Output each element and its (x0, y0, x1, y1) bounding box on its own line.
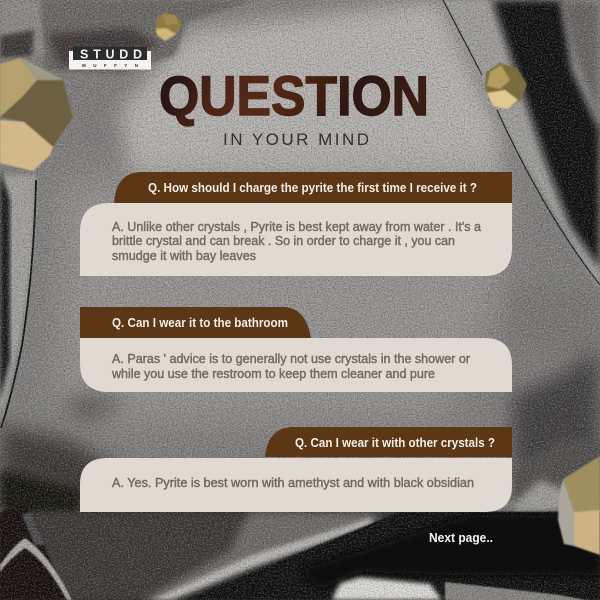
logo: Studd Muffyn (69, 47, 151, 70)
answer 1 text (112, 220, 481, 263)
question 1 bar (114, 172, 512, 203)
title: QUESTION (159, 64, 429, 127)
panel: question and answer 1 (80, 172, 512, 276)
right dark folds (443, 0, 600, 290)
question 1 text: Q. How should I charge the pyrite the first time I receive it ? (148, 181, 477, 195)
answer 2 text: while you use the restroom to keep them cleaner and pure (111, 367, 435, 381)
icon: small pyrite crystal, top (156, 12, 182, 41)
question 2 text: Q. Can I wear it to the bathroom (112, 316, 288, 330)
answer 1 text: smudge it with bay leaves (112, 249, 256, 263)
logo: Studd Muffyn: MUFFYN (82, 63, 138, 68)
icon: large pyrite crystal, top left (0, 57, 73, 171)
next page label: Next page.. (429, 531, 493, 545)
left fold (0, 175, 36, 425)
white highlight (332, 577, 442, 600)
answer 2 text: A. Paras ' advice is to generally not use crystals in the shower or (112, 352, 470, 366)
answer 3 text: A. Yes. Pyrite is best worn with amethyst and with black obsidian (112, 476, 474, 490)
panel: question and answer 2 (80, 307, 512, 392)
panel: question and answer 3 (80, 427, 512, 512)
answer 1 text: A. Unlike other crystals , Pyrite is best kept away from water . It's a (112, 220, 481, 234)
logo: Studd Muffyn: STUDD (80, 48, 142, 62)
question 3 bar (265, 427, 512, 457)
subtitle: IN YOUR MIND (223, 130, 369, 149)
answer 2 text (111, 352, 470, 381)
answer 1 text: brittle crystal and can break . So in order to charge it , you can (112, 234, 455, 248)
answer 1 box (80, 203, 512, 276)
icon: pyrite crystal, right (485, 63, 527, 109)
lower left dark (0, 425, 120, 520)
answer 2 box (80, 338, 512, 392)
icon: pyrite crystal, bottom right (558, 456, 600, 555)
question 2 bar (80, 307, 311, 338)
answer 3 box (80, 458, 512, 512)
question 3 text: Q. Can I wear it with other crystals ? (295, 436, 495, 450)
